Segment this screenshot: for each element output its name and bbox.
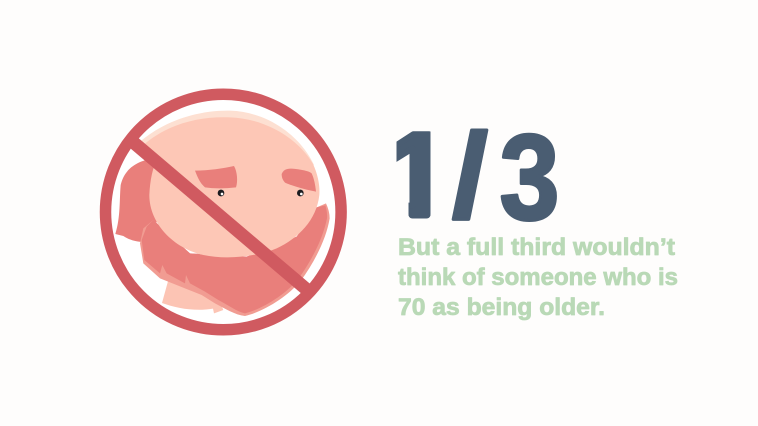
- prohibition diagonal bar: [133, 142, 312, 294]
- left eyebrow: [195, 166, 237, 188]
- caption text: [398, 234, 678, 321]
- face: [143, 117, 319, 257]
- statistic: 1/3: 1: [384, 108, 452, 244]
- statistic: 1/3: [396, 128, 557, 222]
- left eye: [218, 190, 224, 196]
- beard: [142, 205, 327, 313]
- hair at back of head: [115, 158, 162, 242]
- caption text: 70 as being older.: [398, 294, 605, 321]
- caption text: think of someone who is: [398, 264, 678, 291]
- bearded head illustration: [115, 111, 330, 316]
- icon: crossed-out bearded head: [105, 94, 341, 330]
- right eye: [297, 190, 304, 196]
- white disc inside prohibition sign: [105, 94, 341, 330]
- neck: [162, 280, 223, 313]
- caption text: But a full third wouldn’t: [398, 234, 675, 261]
- right eyebrow: [282, 169, 316, 192]
- statistic: 1/3: 3: [500, 109, 560, 245]
- beard outer light edge: [140, 203, 330, 316]
- head highlight rim: [140, 111, 314, 180]
- statistic: 1/3: /: [452, 109, 488, 243]
- prohibition ring: [106, 94, 341, 330]
